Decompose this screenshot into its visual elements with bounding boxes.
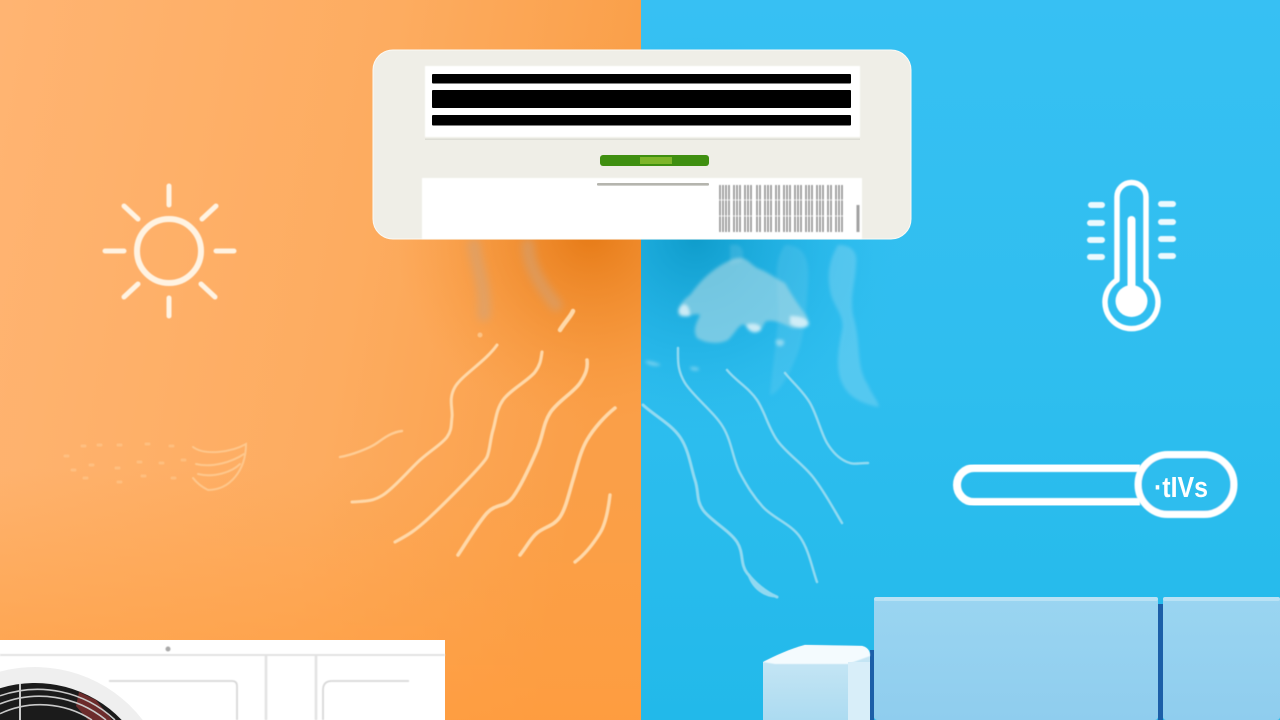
- sofa back cushion right: [1158, 597, 1280, 720]
- sofa back cushion left: [870, 597, 1158, 720]
- translucent cool air plumes: [730, 245, 879, 407]
- unit body: [373, 50, 911, 239]
- panel: hot side background: [0, 0, 641, 720]
- outdoor condenser unit: [0, 640, 445, 720]
- fan grille: [0, 683, 122, 720]
- slider track: [957, 468, 1140, 502]
- panel: cool side background: [641, 0, 1280, 720]
- lower white display panel: [422, 178, 862, 239]
- faint heat particles and wing: [65, 444, 246, 490]
- fan bezel: [0, 667, 143, 720]
- sofa: [763, 597, 1280, 720]
- warm air smoke under unit: [474, 245, 556, 315]
- condenser casing: [0, 640, 445, 720]
- barcode: [718, 185, 858, 232]
- icon: sun: [105, 186, 234, 316]
- sofa armrest: [763, 645, 870, 720]
- cool air streams: [643, 348, 868, 597]
- warm air streams: [340, 311, 615, 562]
- green status indicator: [600, 155, 709, 166]
- casing seams: [0, 646, 445, 720]
- air conditioner indoor unit: [373, 50, 911, 239]
- cool mist cloud: [645, 258, 809, 371]
- slider knob: [1138, 454, 1234, 514]
- icon: thermometer: [1090, 182, 1173, 329]
- temperature slider: [957, 454, 1234, 514]
- air vent panel: [425, 66, 860, 140]
- slider reading: ·tIVs: [1154, 472, 1208, 504]
